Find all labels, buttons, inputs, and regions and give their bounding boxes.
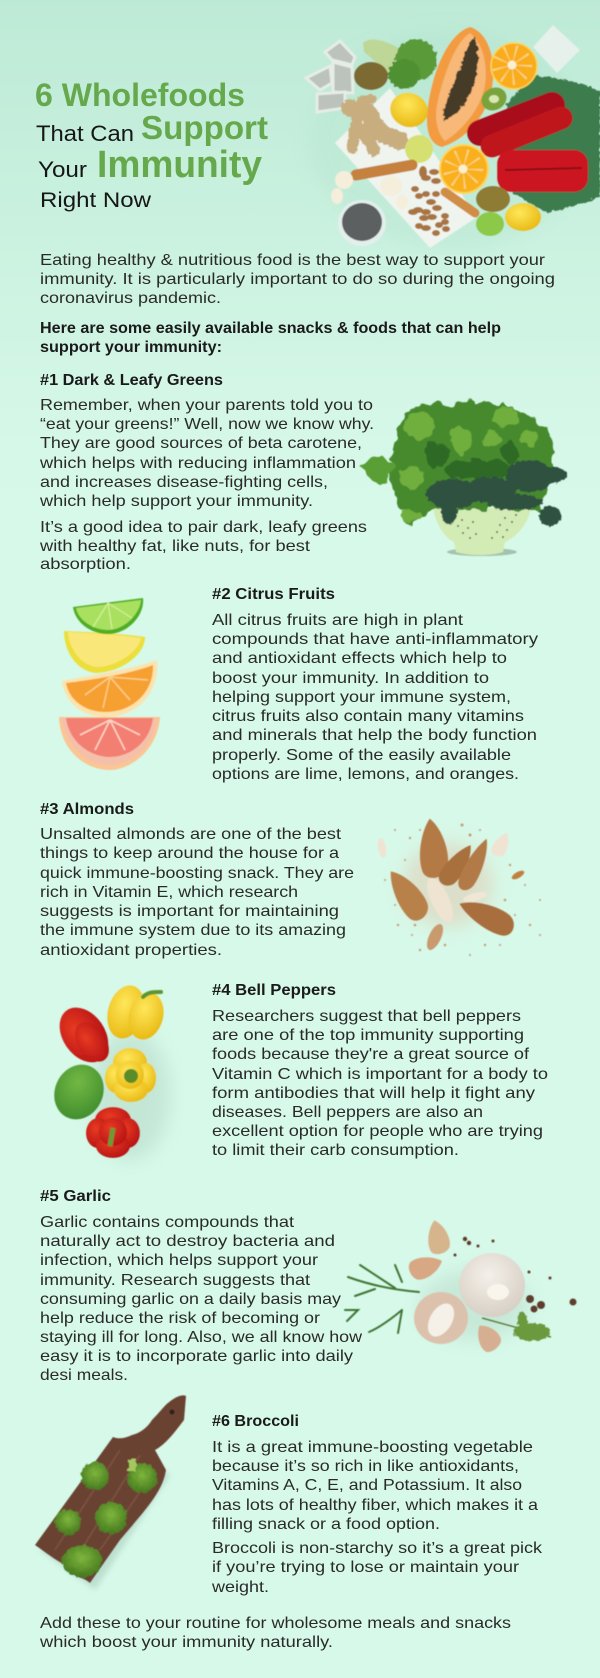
bold lead-in: Here are some easily available snacks & foods that can help (40, 320, 501, 337)
yellow pepper middle (105, 1048, 156, 1102)
text: peppers (212, 1008, 548, 1159)
text: peppers: to limit their carb consumption. (212, 1142, 459, 1159)
lemon (64, 631, 145, 673)
white shard left (376, 837, 388, 859)
text: broccoli: weight. (211, 1579, 269, 1596)
bulb root (487, 1284, 509, 1300)
clove left (406, 1251, 446, 1283)
bold lead-in (40, 320, 501, 356)
lime (73, 598, 143, 634)
grapefruit (59, 717, 160, 770)
broccoli stem (363, 39, 402, 88)
broccoli head (388, 39, 437, 89)
chia bowl (338, 200, 386, 246)
title: Immunity (97, 144, 262, 186)
almond shard bottom (424, 922, 446, 952)
board shadow (40, 1442, 170, 1590)
title: That Can (36, 121, 134, 146)
garlic cloves (331, 171, 408, 209)
colander shadow (447, 548, 517, 556)
colander holes (451, 514, 517, 539)
title: Support (141, 109, 268, 146)
text: greens: “eat your greens!” Well, now we know why. (40, 416, 374, 433)
floret 3 (55, 1509, 81, 1535)
lime flesh (76, 600, 141, 630)
image: garlic and herbs (345, 1218, 576, 1355)
almonds (408, 166, 450, 236)
text: broccoli: if you’re trying to lose or maintain your (212, 1559, 520, 1576)
title: 6 Wholefoods (35, 77, 245, 113)
grapefruit flesh (62, 718, 157, 765)
text: garlic: staying ill for long. Also, we all know how (40, 1329, 362, 1346)
intro paragraph: immunity. It is particularly important to do so during the ongoing (40, 271, 555, 288)
orange slice spokes (452, 158, 474, 180)
title: Right Now (40, 189, 152, 212)
text: broccoli: has lots of healthy fiber, which makes it a (212, 1497, 538, 1514)
lime bottom (476, 212, 504, 236)
garlic bulb (459, 1253, 525, 1317)
text: peppers: diseases. Bell peppers are also an (212, 1104, 483, 1121)
image: bell peppers (45, 981, 170, 1160)
almond large left (380, 864, 434, 925)
paper sheet (533, 25, 580, 73)
heading: #2: #2 Citrus Fruits (212, 586, 335, 603)
soft shadow (420, 1270, 530, 1340)
text: citrus: properly. Some of the easily available (212, 747, 511, 764)
small shard (510, 869, 526, 881)
opened bulb inner (422, 1299, 460, 1341)
orange (62, 660, 157, 717)
red pepper lower (497, 150, 588, 192)
floret 2 (127, 1459, 157, 1493)
orange segments (85, 677, 148, 708)
text: garlic: infection, which helps support your (40, 1252, 319, 1269)
leaf mass (389, 401, 553, 525)
red pepper lobe 1 (480, 105, 552, 133)
text: garlic (40, 1214, 362, 1384)
text: almonds: antioxidant properties. (40, 942, 222, 959)
text: broccoli: It is a great immune-boosting vegetable (212, 1439, 533, 1456)
opened bulb (414, 1292, 468, 1344)
text: peppers: Researchers suggest that bell peppers (212, 1008, 521, 1025)
kiwi half core (489, 95, 499, 103)
light leaves (400, 408, 540, 522)
almond powder (403, 843, 493, 927)
text: garlic: Garlic contains compounds that (40, 1214, 295, 1231)
heading: #5: #5 Garlic (40, 1188, 111, 1205)
text: broccoli: filling snack or a food option. (212, 1516, 440, 1533)
text: citrus: boost your immunity. In addition to (212, 670, 489, 687)
text: broccoli: Vitamins A, C, E, and Potassium. It also (212, 1477, 522, 1494)
orange slice centre (458, 164, 468, 174)
text: broccoli (211, 1439, 543, 1596)
text: broccoli: because it’s so rich in like antioxidants, (212, 1458, 519, 1475)
wood grain (55, 1450, 155, 1560)
peppercorns and seeds (454, 1237, 576, 1312)
text: greens: which helps with reducing inflammation (39, 455, 356, 472)
text: citrus: citrus fruits also contain many vitamins (212, 708, 524, 725)
text: citrus (212, 612, 538, 783)
text: garlic: desi meals. (40, 1367, 128, 1384)
white shard top right (489, 830, 513, 859)
grapefruit segments (80, 720, 140, 750)
text: greens: absorption. (40, 556, 131, 573)
almond shard middle (435, 840, 479, 890)
tea bags (306, 41, 355, 112)
clove bottom (471, 1320, 504, 1355)
intro paragraph: Eating healthy & nutritious food is the best way to support your (40, 252, 546, 269)
papaya flesh highlight (436, 33, 486, 141)
lime segments (93, 603, 132, 629)
closing text: which boost your immunity naturally. (39, 1634, 333, 1651)
text: greens (39, 397, 374, 573)
text: almonds (40, 826, 354, 959)
heading: #4: #4 Bell Peppers (212, 982, 336, 999)
text: almonds: quick immune-boosting snack. They are (40, 865, 354, 882)
text: garlic: easy it is to incorporate garlic into daily (40, 1348, 353, 1365)
text: citrus: and minerals that help the body function (212, 727, 537, 744)
image: stacked citrus slices (59, 598, 160, 770)
lime slice (405, 135, 433, 163)
carrot (445, 192, 475, 213)
text: greens: and increases disease-fighting cells, (40, 474, 328, 491)
heading: #3: #3 Almonds (40, 801, 134, 818)
clove top (424, 1218, 452, 1256)
text: peppers: are one of the top immunity supporting (212, 1027, 524, 1044)
text: greens: which help support your immunity. (39, 493, 313, 510)
dark shading (424, 440, 518, 480)
text: citrus: helping support your immune system, (212, 689, 511, 706)
papaya (427, 27, 493, 147)
yellow pepper top (102, 981, 169, 1044)
text: citrus: options are lime, lemons, and oranges. (212, 766, 519, 783)
papaya seeds (443, 37, 478, 121)
red pepper bottom (86, 1107, 140, 1158)
rosemary (345, 1265, 419, 1333)
lemon bottom (505, 203, 541, 231)
text: greens: Remember, when your parents told you to (40, 397, 373, 414)
red pepper left (50, 998, 118, 1072)
red pepper lobe 2 (492, 118, 561, 146)
text: peppers: form antibodies that will help it fight any (212, 1085, 535, 1102)
white chip (462, 890, 488, 904)
stem (143, 992, 161, 997)
thyme (482, 1312, 551, 1341)
colander (433, 508, 531, 555)
kale leaf (505, 75, 600, 213)
almond lower right (454, 893, 518, 940)
image: leafy greens in colander (362, 401, 567, 556)
text: almonds: the immune system due to its amazing (40, 922, 346, 939)
text: almonds: Unsalted almonds are one of the best (40, 826, 342, 843)
text: garlic: help reduce the risk of becoming or (40, 1310, 321, 1327)
soft shadow (90, 1030, 170, 1160)
text: almonds: things to keep around the house for a (40, 845, 339, 862)
title (35, 77, 268, 212)
text: almonds: rich in Vitamin E, which research (40, 884, 298, 901)
text: garlic: immunity. Research suggests that (40, 1272, 311, 1289)
text: almonds: suggests is important for maintaining (40, 903, 339, 920)
turmeric (356, 165, 412, 175)
text: citrus: compounds that have anti-inflammatory (212, 631, 538, 648)
kiwi (354, 62, 388, 90)
text: peppers: foods because they're a great source of (212, 1046, 530, 1063)
orange flesh (66, 665, 153, 712)
leaves left sprig (362, 455, 395, 485)
image: crushed almonds (376, 817, 541, 956)
text: garlic: consuming garlic on a daily basis may (40, 1291, 341, 1308)
kiwi bottom (476, 186, 510, 212)
floret 1 (81, 1462, 109, 1490)
kale (426, 460, 567, 526)
almond top (416, 817, 450, 879)
lemon flesh (68, 632, 141, 667)
yellow pepper stem (124, 1069, 138, 1083)
hero image: assorted wholefoods (306, 25, 600, 250)
wooden board (35, 1395, 186, 1583)
text: greens: with healthy fat, like nuts, for best (39, 538, 311, 555)
closing text: Add these to your routine for wholesome meals and snacks (40, 1615, 511, 1632)
green pepper (45, 1056, 113, 1128)
floret 4 (95, 1502, 127, 1534)
floret 5 (62, 1545, 102, 1577)
intro paragraph (40, 252, 555, 307)
ginger root (350, 99, 400, 150)
orange spokes (501, 54, 523, 76)
orange half top (491, 43, 537, 89)
text: greens: It’s a good idea to pair dark, leafy greens (40, 519, 367, 536)
text: broccoli: Broccoli is non-starchy so it’s a great pick (212, 1540, 543, 1557)
intro paragraph: coronavirus pandemic. (40, 290, 221, 307)
text: garlic: naturally act to destroy bacteria and (40, 1233, 335, 1250)
orange slice (440, 145, 488, 193)
heading: #1: #1 Dark & Leafy Greens (40, 372, 223, 389)
board hole (170, 1410, 174, 1414)
text: greens: They are good sources of beta carotene, (40, 435, 362, 452)
almond white core (422, 874, 458, 926)
orange centre (508, 60, 516, 70)
heading: #6: #6 Broccoli (212, 1413, 299, 1430)
closing text (39, 1615, 511, 1651)
title: Your (38, 157, 87, 182)
almond shard right (455, 835, 495, 894)
text: peppers: Vitamin C which is important for a body to (212, 1066, 548, 1083)
white marble board (335, 88, 477, 248)
chia seeds (342, 203, 382, 241)
red pepper groove (505, 168, 582, 170)
text: citrus: and antioxidant effects which help to (212, 650, 507, 667)
red pepper stem (110, 1128, 113, 1146)
kiwi half (477, 83, 511, 115)
bold lead-in: support your immunity: (40, 339, 222, 356)
text: citrus: All citrus fruits are high in plant (212, 612, 464, 629)
almond dust specks (384, 824, 541, 956)
image: broccoli on wooden board (35, 1395, 186, 1590)
lemon (385, 88, 433, 132)
text: peppers: excellent option for people who are trying (212, 1123, 543, 1140)
